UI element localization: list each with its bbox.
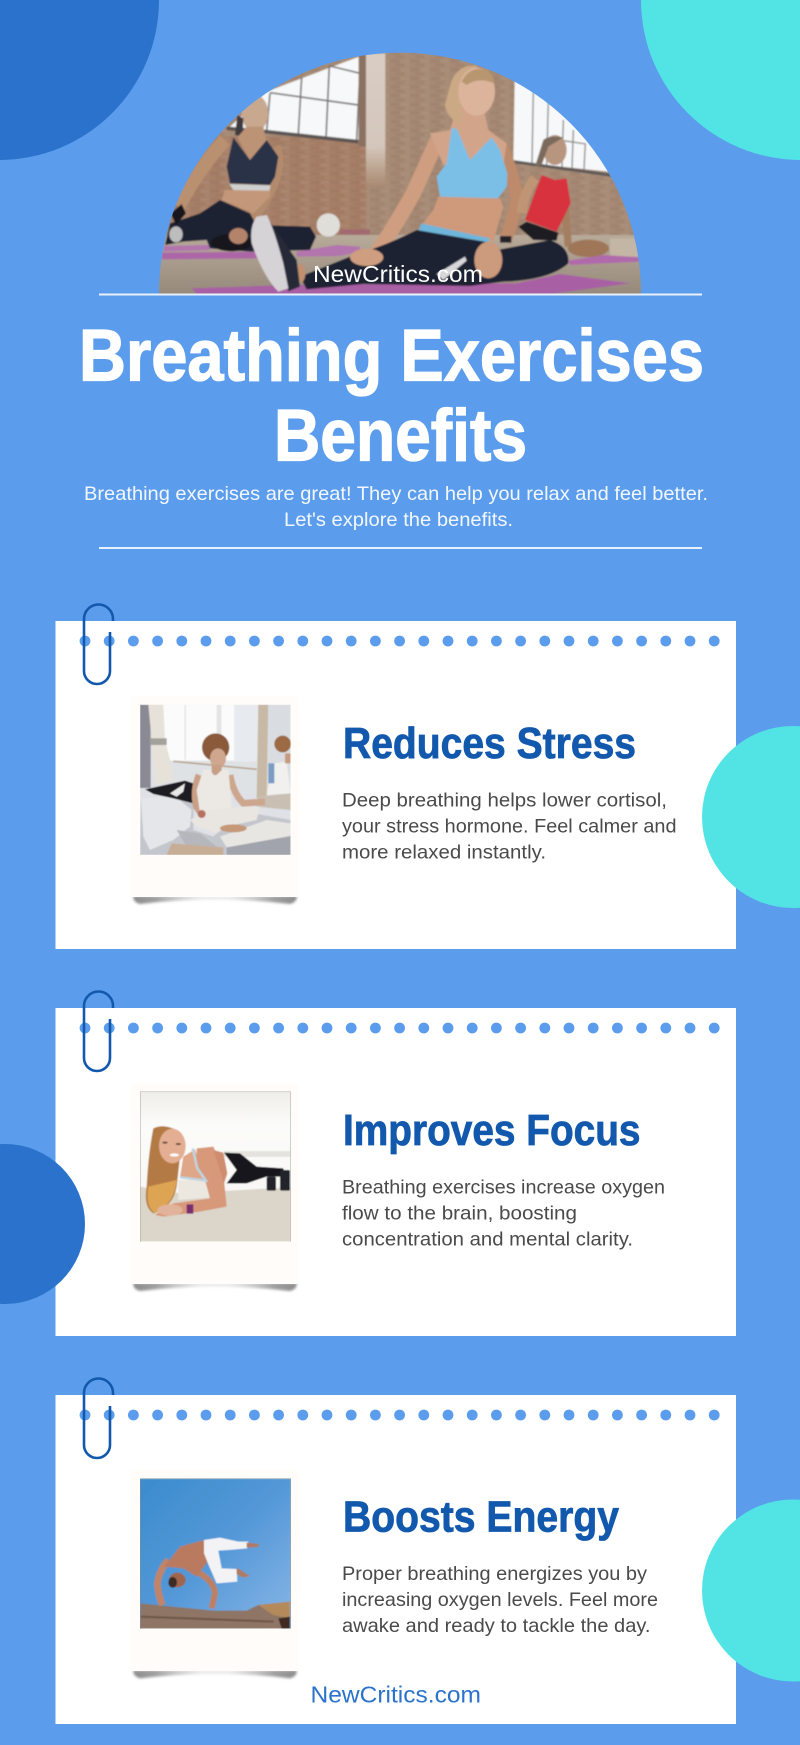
panel: reduces stress (56, 604, 736, 949)
icon: paperclip (84, 992, 113, 1071)
body: reduces stress: Deep breathing helps lower cortisol, (342, 790, 667, 812)
heading: improves focus: Improves Focus (343, 1106, 640, 1155)
panel: boosts energy (56, 1378, 736, 1724)
decorative circle: top right (641, 0, 800, 160)
decorative circle: left of panel 2 (0, 1144, 85, 1304)
polaroid photo: woman meditating on bed (131, 697, 298, 904)
decorative circle: right of panel 1 (702, 726, 800, 908)
body: improves focus: Breathing exercises increase oxygen (342, 1176, 665, 1198)
divider bottom (99, 547, 702, 549)
watermark on hero: NewCritics.com (313, 261, 483, 287)
title (79, 316, 704, 476)
decorative circle: top left (0, 0, 159, 160)
title: Breathing Exercises (79, 316, 704, 396)
decorative circle: right of panel 3 (702, 1500, 800, 1682)
icon: paperclip (84, 1378, 113, 1458)
hero photo: yoga class in arch (150, 50, 650, 297)
polaroid photo: woman planking on beach (131, 1084, 298, 1291)
divider top (99, 294, 702, 296)
title: Benefits (274, 396, 527, 476)
body: improves focus (342, 1176, 665, 1250)
heading: boosts energy: Boosts Energy (343, 1492, 619, 1542)
body: reduces stress: your stress hormone. Feel calmer and (342, 816, 676, 838)
notebook holes (80, 1410, 720, 1420)
body: reduces stress: more relaxed instantly. (342, 842, 546, 864)
body: boosts energy: Proper breathing energizes you by (342, 1563, 647, 1585)
body: improves focus: flow to the brain, boosting (342, 1202, 577, 1224)
footer watermark: NewCritics.com (310, 1682, 481, 1708)
heading: reduces stress: Reduces Stress (343, 719, 636, 768)
notebook holes (80, 1023, 720, 1033)
polaroid photo: man in yoga pose on log (131, 1471, 298, 1678)
body: boosts energy: awake and ready to tackle the day. (342, 1615, 650, 1637)
icon: paperclip (84, 604, 113, 684)
panel: improves focus (56, 992, 736, 1336)
body: improves focus: concentration and mental clarity. (342, 1228, 633, 1250)
body: boosts energy: increasing oxygen levels. Feel more (342, 1589, 658, 1611)
intro text (84, 483, 708, 531)
intro text: Let's explore the benefits. (284, 509, 513, 531)
notebook holes (80, 636, 720, 646)
body: boosts energy (342, 1563, 658, 1637)
intro text: Breathing exercises are great! They can help you relax and feel better. (84, 483, 708, 505)
body: reduces stress (342, 790, 676, 864)
